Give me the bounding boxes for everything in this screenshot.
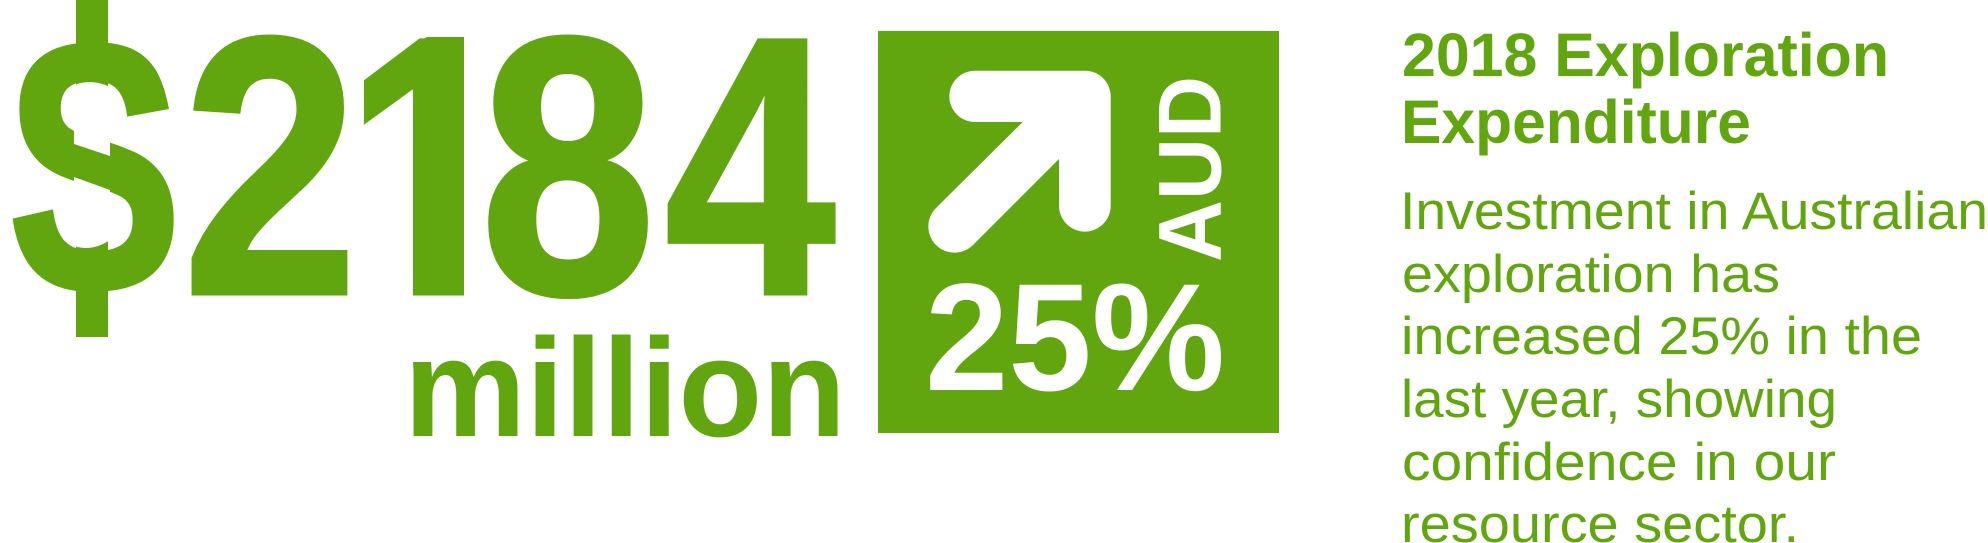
- heading: 2018 Exploration: [1402, 21, 1889, 89]
- big figure: $2184: [11, 0, 838, 372]
- unit label: million: million: [404, 309, 846, 466]
- label: AUD: AUD: [1140, 76, 1240, 262]
- body text: last year, showing: [1401, 370, 1837, 429]
- body text: increased 25% in the: [1401, 307, 1922, 366]
- heading: Expenditure: [1401, 88, 1751, 156]
- panel: 25% increase AUD: [878, 31, 1279, 433]
- heading: [1401, 21, 1889, 156]
- body text: Investment in Australian: [1400, 182, 1988, 241]
- body text: [1400, 182, 1988, 543]
- stat: 25%: 25%: [925, 252, 1225, 423]
- body text: exploration has: [1402, 245, 1780, 304]
- icon: upward arrow: [928, 71, 1111, 253]
- body text: confidence in our: [1402, 433, 1836, 492]
